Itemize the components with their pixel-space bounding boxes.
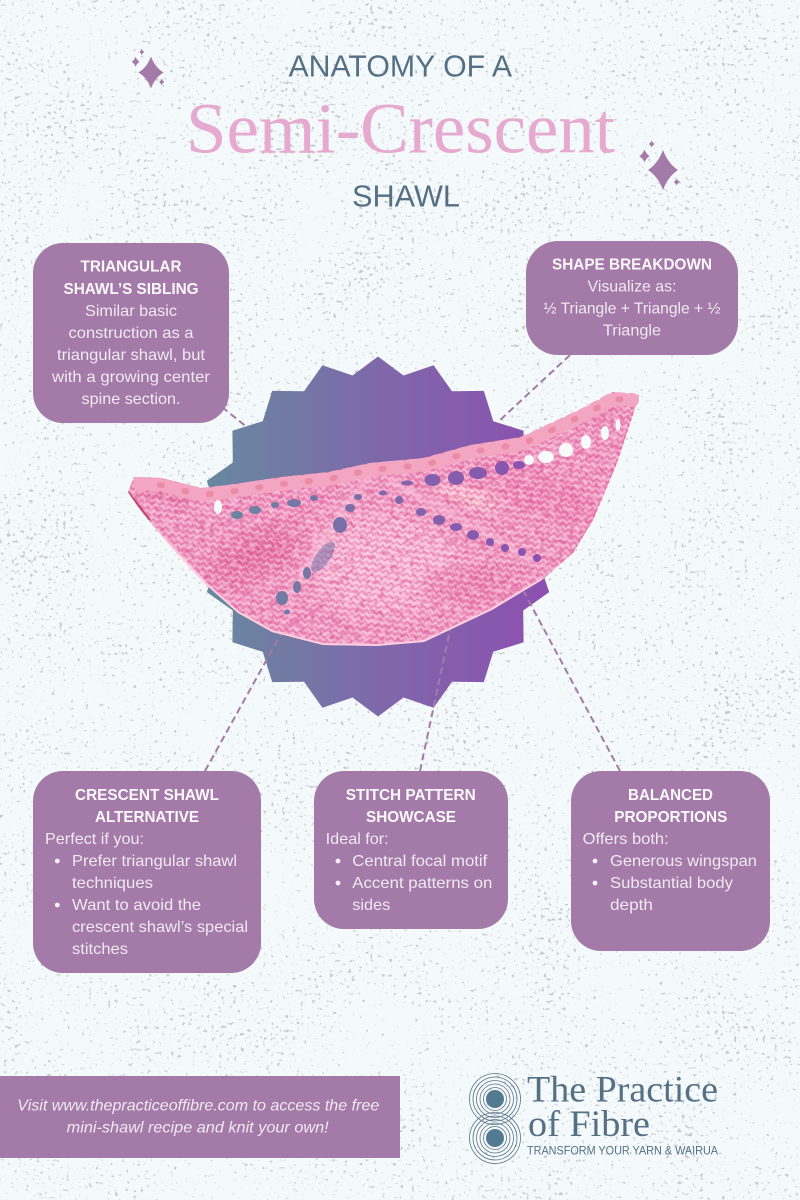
eyelet holes showing badge bbox=[231, 461, 541, 614]
title line: Semi-Crescent: Semi-Crescent bbox=[186, 89, 615, 169]
panel: crescent shawl alternative: crescent shawl’s special bbox=[72, 919, 248, 936]
panel: crescent shawl alternative: stitches bbox=[72, 941, 128, 958]
panel: stitch pattern showcase bbox=[314, 771, 508, 929]
garter border along top edge bbox=[140, 399, 632, 495]
panel: triangular shawl's sibling: Similar basic bbox=[85, 303, 177, 320]
panel: stitch pattern showcase: Central focal motif bbox=[352, 853, 488, 870]
panel: crescent shawl alternative: Perfect if you: bbox=[45, 831, 144, 848]
knitted shawl photo bbox=[120, 385, 650, 655]
panel: crescent shawl alternative bbox=[33, 771, 261, 973]
title line: Shawl: SHAWL bbox=[352, 179, 460, 214]
icon: sparkles top right bbox=[640, 140, 680, 190]
footer call to action banner: mini-shawl recipe and knit your own! bbox=[67, 1120, 329, 1137]
panel: shape breakdown: Visualize as: bbox=[588, 278, 676, 296]
footer call to action banner: Visit www.thepracticeoffibre.com to access the free bbox=[17, 1098, 379, 1115]
dashed connector lines bbox=[205, 355, 620, 771]
panel: triangular shawl's sibling: SHAWL’S SIBLING bbox=[64, 281, 198, 298]
central starburst badge bbox=[198, 356, 558, 716]
panel: balanced proportions: Offers both: bbox=[583, 831, 669, 848]
panel: crescent shawl alternative: ALTERNATIVE bbox=[95, 809, 199, 826]
panel: triangular shawl's sibling: spine section. bbox=[82, 391, 180, 408]
panel: balanced proportions: BALANCED bbox=[628, 787, 713, 804]
panel: crescent shawl alternative: techniques bbox=[72, 875, 153, 892]
logo: wordmark: of Fibre bbox=[528, 1104, 650, 1145]
logo: wordmark bbox=[527, 1070, 718, 1157]
panel: stitch pattern showcase: SHOWCASE bbox=[366, 809, 456, 826]
eyelet holes showing paper bbox=[214, 419, 620, 514]
panel: triangular shawl's sibling: triangular shawl, but bbox=[57, 347, 206, 364]
icon: sparkles top left bbox=[132, 49, 164, 88]
title line: Anatomy of a: ANATOMY OF A bbox=[288, 49, 512, 84]
panel: triangular shawl's sibling bbox=[33, 243, 229, 423]
panel: triangular shawl's sibling: TRIANGULAR bbox=[80, 259, 182, 276]
panel: crescent shawl alternative: Prefer triangular shawl bbox=[72, 853, 237, 870]
panel: triangular shawl's sibling: with a growing center bbox=[51, 369, 211, 386]
panel: stitch pattern showcase: STITCH PATTERN bbox=[346, 787, 476, 804]
panel: shape breakdown: ½ Triangle + Triangle + ½ bbox=[544, 301, 720, 318]
panel: balanced proportions: Substantial body bbox=[610, 875, 733, 892]
logo: concentric yarn rings bbox=[470, 1074, 520, 1164]
panel: shape breakdown: Triangle bbox=[603, 323, 661, 340]
panel: triangular shawl's sibling: construction as a bbox=[68, 325, 194, 342]
logo: wordmark: TRANSFORM YOUR YARN & WAIRUA bbox=[527, 1145, 718, 1157]
panel: balanced proportions: PROPORTIONS bbox=[614, 809, 727, 826]
footer call to action banner bbox=[0, 1076, 400, 1158]
panel: stitch pattern showcase: Ideal for: bbox=[326, 831, 389, 848]
panel: balanced proportions: Generous wingspan bbox=[610, 853, 757, 870]
raised spine ridges bbox=[285, 472, 372, 602]
panel: shape breakdown: SHAPE BREAKDOWN bbox=[552, 256, 712, 274]
logo: wordmark: The Practice bbox=[527, 1070, 718, 1111]
panel: shape breakdown bbox=[526, 241, 738, 355]
panel: balanced proportions bbox=[571, 771, 770, 951]
panel: balanced proportions: depth bbox=[610, 897, 653, 914]
panel: crescent shawl alternative: CRESCENT SHAWL bbox=[75, 787, 219, 804]
panel: crescent shawl alternative: Want to avoid the bbox=[72, 897, 201, 914]
panel: stitch pattern showcase: sides bbox=[352, 897, 390, 914]
panel: stitch pattern showcase: Accent patterns on bbox=[352, 875, 492, 892]
